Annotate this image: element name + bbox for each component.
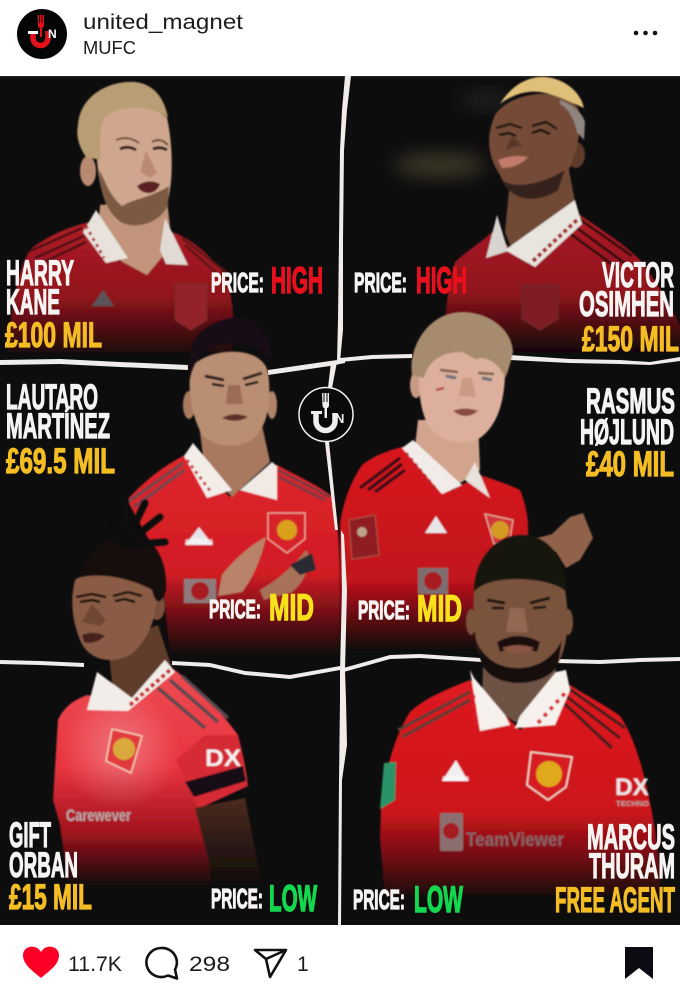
jersey: DX	[615, 774, 649, 801]
name: LAUTARO	[6, 378, 98, 417]
player panel: Lautaro Martinez: MARTÍNEZ	[6, 406, 110, 446]
price rating	[209, 587, 314, 628]
player panel: Marcus Thuram	[353, 535, 675, 920]
player panel: Rasmus Hojlund	[340, 312, 675, 650]
price rating: PRICE:	[211, 267, 264, 298]
jersey	[50, 500, 262, 885]
icon: heart likes	[23, 947, 59, 978]
price rating	[211, 260, 323, 301]
avatar logo	[17, 9, 67, 59]
head	[410, 312, 513, 490]
jersey	[127, 318, 340, 655]
jersey: DX	[205, 745, 241, 772]
like count: 11.7K	[68, 953, 122, 976]
jersey	[8, 82, 234, 352]
price rating: PRICE:	[353, 884, 405, 915]
head	[466, 535, 573, 722]
jersey	[443, 77, 680, 352]
subtitle: MUFC	[83, 38, 136, 58]
transfer value: £69.5 MIL	[6, 442, 115, 481]
jersey: TECHNO	[616, 801, 650, 808]
player panel: Harry Kane: KANE	[6, 283, 60, 322]
player panel: Lautaro Martinez	[6, 318, 340, 655]
price rating: MID	[417, 588, 462, 629]
jersey: TeamViewer	[466, 830, 565, 851]
transfer value: £100 MIL	[5, 316, 102, 355]
name: HARRY	[6, 254, 74, 293]
name: GIFT	[9, 816, 51, 855]
avatar logo: N	[48, 27, 57, 41]
comment count: 298	[189, 953, 230, 976]
icon: share plane	[255, 950, 286, 977]
center logo badge: N	[335, 411, 344, 426]
jersey	[380, 535, 660, 895]
price rating	[353, 879, 463, 920]
jersey	[340, 312, 593, 650]
player panel: Gift Orban: ORBAN	[9, 846, 78, 885]
price rating: HIGH	[271, 260, 323, 301]
player panel: Harry Kane	[5, 82, 323, 355]
price rating: HIGH	[416, 260, 467, 301]
price rating	[211, 878, 317, 919]
price rating: PRICE:	[358, 595, 410, 625]
player panel: Gift Orban	[9, 500, 317, 919]
center logo badge	[299, 388, 353, 442]
player panel: Victor Osimhen	[354, 77, 680, 359]
username: united_magnet	[83, 11, 243, 34]
icon: comment bubble	[146, 948, 177, 978]
price rating: PRICE:	[354, 267, 407, 298]
jersey: Carewever	[66, 806, 131, 825]
engagement bar	[23, 947, 653, 979]
price rating: MID	[269, 587, 314, 628]
header: account row	[17, 9, 657, 59]
jersey: adidas	[442, 774, 470, 783]
head	[72, 500, 172, 706]
price rating: PRICE:	[211, 883, 263, 914]
price rating	[358, 588, 462, 629]
head	[77, 82, 172, 275]
price rating: LOW	[414, 879, 463, 920]
head	[489, 77, 585, 262]
head	[183, 318, 277, 497]
more options icon	[634, 31, 657, 35]
price rating	[354, 260, 467, 301]
share count: 1	[297, 953, 309, 976]
icon: bookmark	[625, 947, 653, 979]
transfer value: £15 MIL	[9, 878, 92, 917]
jersey: adidas	[185, 537, 214, 546]
price rating: LOW	[269, 878, 317, 919]
price rating: PRICE:	[209, 594, 261, 624]
